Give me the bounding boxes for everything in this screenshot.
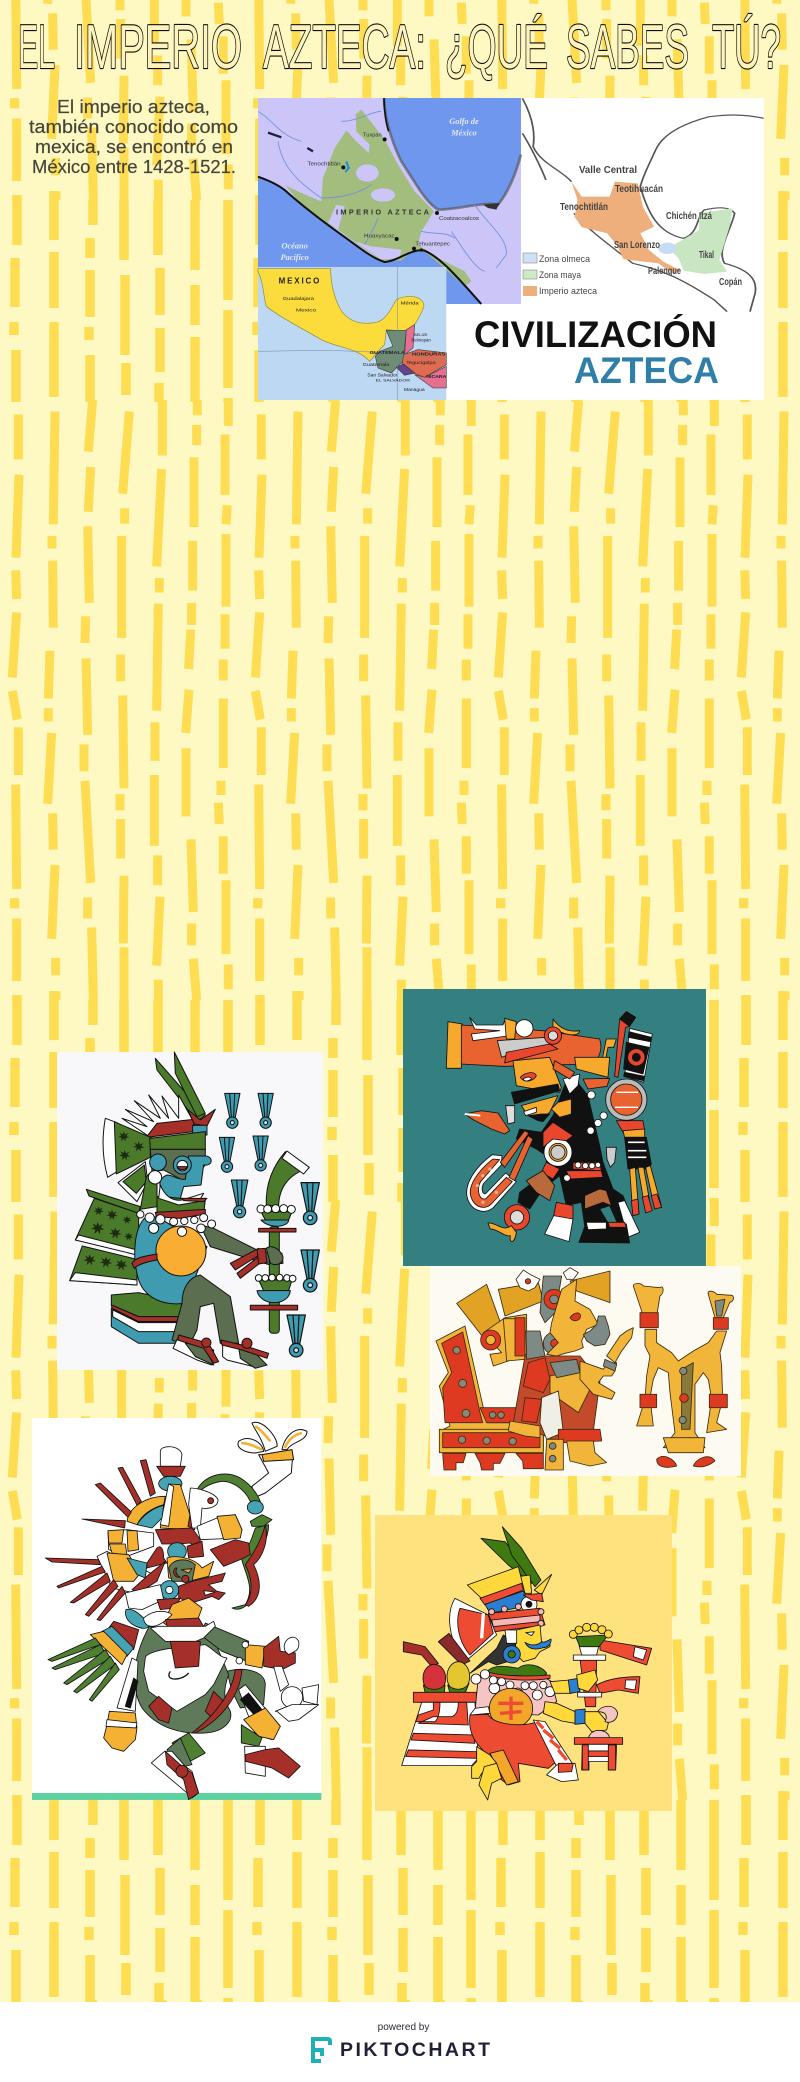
altar (402, 1692, 478, 1766)
map labels: Tikal (699, 250, 714, 261)
image: black and gold deity on teal panel (403, 989, 706, 1266)
legend: Zona olmeca (539, 254, 591, 265)
map: modern Mexico and Central America: BELIZE (414, 332, 428, 337)
map: modern Mexico and Central America: EL SALVADOR (376, 378, 410, 383)
image: Tlaloc on white panel (57, 1052, 323, 1370)
intro text block: también conocido como (29, 117, 238, 137)
rain drops (219, 1093, 319, 1357)
rivers (258, 111, 506, 271)
heading: civilización azteca: CIVILIZACIÓN (474, 313, 717, 355)
map labels: San Lorenzo (614, 240, 660, 251)
arms (543, 1678, 608, 1732)
zone: maya (668, 208, 733, 274)
wordmark: PIKTOCHART (340, 2039, 490, 2061)
left wings (45, 1547, 167, 1621)
map labels: Valle Central (579, 165, 637, 176)
torso (126, 1598, 295, 1733)
face (148, 1149, 211, 1205)
face (511, 1057, 575, 1122)
zone: empire territory (285, 110, 471, 286)
hair and face (470, 1625, 551, 1673)
intro text block: México entre 1428-1521. (32, 157, 236, 177)
torso (516, 1057, 640, 1242)
zone: olmec (658, 243, 677, 254)
map labels: Tuxpan (363, 133, 382, 139)
staff and flags (569, 1623, 652, 1738)
figure (508, 1279, 633, 1470)
heading: civilización azteca: AZTECA (574, 350, 719, 391)
map labels: Tenochtitlán (560, 202, 608, 213)
map labels: Tehuantepec (415, 241, 450, 247)
intro text block: El imperio azteca, (57, 97, 210, 117)
small altar (574, 1738, 623, 1770)
coastlines (522, 98, 764, 312)
map: modern Mexico and Central America: NICARA (426, 374, 447, 380)
corn offerings (403, 1633, 470, 1693)
image: codex goddess with throne (430, 1266, 741, 1476)
map labels: Teotihuacán (615, 184, 663, 195)
face (125, 1557, 225, 1610)
headdress (446, 1017, 616, 1068)
map labels: Copán (719, 277, 742, 288)
legs and feet (472, 1747, 502, 1800)
heading: civilización azteca (474, 313, 719, 391)
image: Quetzalcoatl on white panel with green bar (32, 1418, 321, 1800)
El Salvador (396, 364, 415, 375)
body (132, 1167, 283, 1347)
image: maize goddess on yellow panel (375, 1515, 672, 1811)
legend (523, 253, 598, 297)
map labels (560, 165, 742, 288)
map: modern Mexico and Central America: MEXICO (279, 277, 321, 286)
Nicaragua (415, 366, 446, 388)
map: modern Mexico and Central America: Belmopan (411, 337, 431, 342)
map: modern Mexico and Central America: Guadalajara (283, 296, 314, 302)
wings (70, 1189, 140, 1285)
title (18, 13, 781, 82)
map labels: IMPERIO AZTECA (336, 208, 431, 217)
leg ornaments (488, 1205, 630, 1243)
title: ¿QUÉ (445, 13, 548, 82)
feet (173, 1335, 269, 1368)
map: right map with empire zones (446, 98, 764, 400)
arm and bag (465, 1106, 533, 1211)
headdress fan (450, 1567, 545, 1662)
legend: Zona maya (539, 270, 582, 281)
title: AZTECA: (263, 13, 426, 82)
zone: aztec empire (571, 182, 680, 274)
map: Aztec empire relief map: México (450, 128, 477, 137)
map: Aztec empire relief map: Pacífico (281, 253, 309, 262)
map: modern Mexico and Central America: Mexico (296, 307, 316, 313)
throne (436, 1326, 543, 1470)
map: Aztec empire relief map (258, 98, 521, 304)
headdress feathers (481, 1527, 552, 1595)
powered by label: powered by (378, 2022, 429, 2033)
panel: map collage (258, 98, 764, 400)
lower wing (48, 1621, 139, 1701)
map: modern Mexico and Central America: Guatemala (363, 362, 390, 368)
map labels: Tenochtitlán (307, 161, 341, 167)
map: modern Mexico and Central America: HONDURAS (412, 352, 446, 358)
headdress (103, 1052, 215, 1202)
map: Aztec empire relief map: Golfo de (449, 117, 479, 126)
map labels: Huaxyacac (364, 233, 395, 239)
map: modern Mexico and Central America: San Salvador (367, 373, 398, 379)
tall banner (606, 1012, 662, 1216)
hanging bag (274, 1637, 319, 1721)
map: Aztec empire relief map: Océano (281, 242, 308, 251)
map: modern Mexico and Central America: Tegucigalpa (406, 360, 436, 366)
intro text block: mexica, se encontró en (35, 137, 233, 157)
map labels (307, 133, 479, 247)
icon: Piktochart logo (313, 2039, 330, 2061)
plant headdress (457, 1268, 610, 1366)
map: modern Mexico and Central America (258, 267, 447, 400)
headdress (82, 1447, 250, 1566)
Belize (405, 325, 415, 355)
legend: Imperio azteca (539, 286, 598, 297)
map: modern Mexico and Central America: GUATEMALA (370, 350, 405, 356)
Mexico (258, 269, 424, 361)
title: IMPERIO (74, 13, 242, 82)
Honduras (402, 350, 446, 377)
map labels: Coatzacoalcos (439, 216, 479, 222)
side tassels (104, 1658, 280, 1751)
map labels: Chichén Itzá (666, 211, 712, 222)
legs and feet (151, 1725, 300, 1800)
Guatemala (375, 330, 406, 373)
branching tree (633, 1283, 733, 1467)
map: modern Mexico and Central America: Mérida (401, 301, 419, 307)
title: SABES (566, 13, 689, 82)
raised arm ornament (238, 1422, 307, 1498)
body (470, 1665, 578, 1785)
map labels: Palenque (648, 266, 681, 277)
footer: white band with Piktochart brand (0, 2002, 800, 2082)
intro text block (29, 97, 238, 177)
map: modern Mexico and Central America: Managua (404, 387, 425, 393)
staff with flowers (250, 1151, 309, 1333)
title: EL (18, 13, 55, 82)
serpent (197, 1474, 272, 1609)
seat (111, 1293, 197, 1343)
